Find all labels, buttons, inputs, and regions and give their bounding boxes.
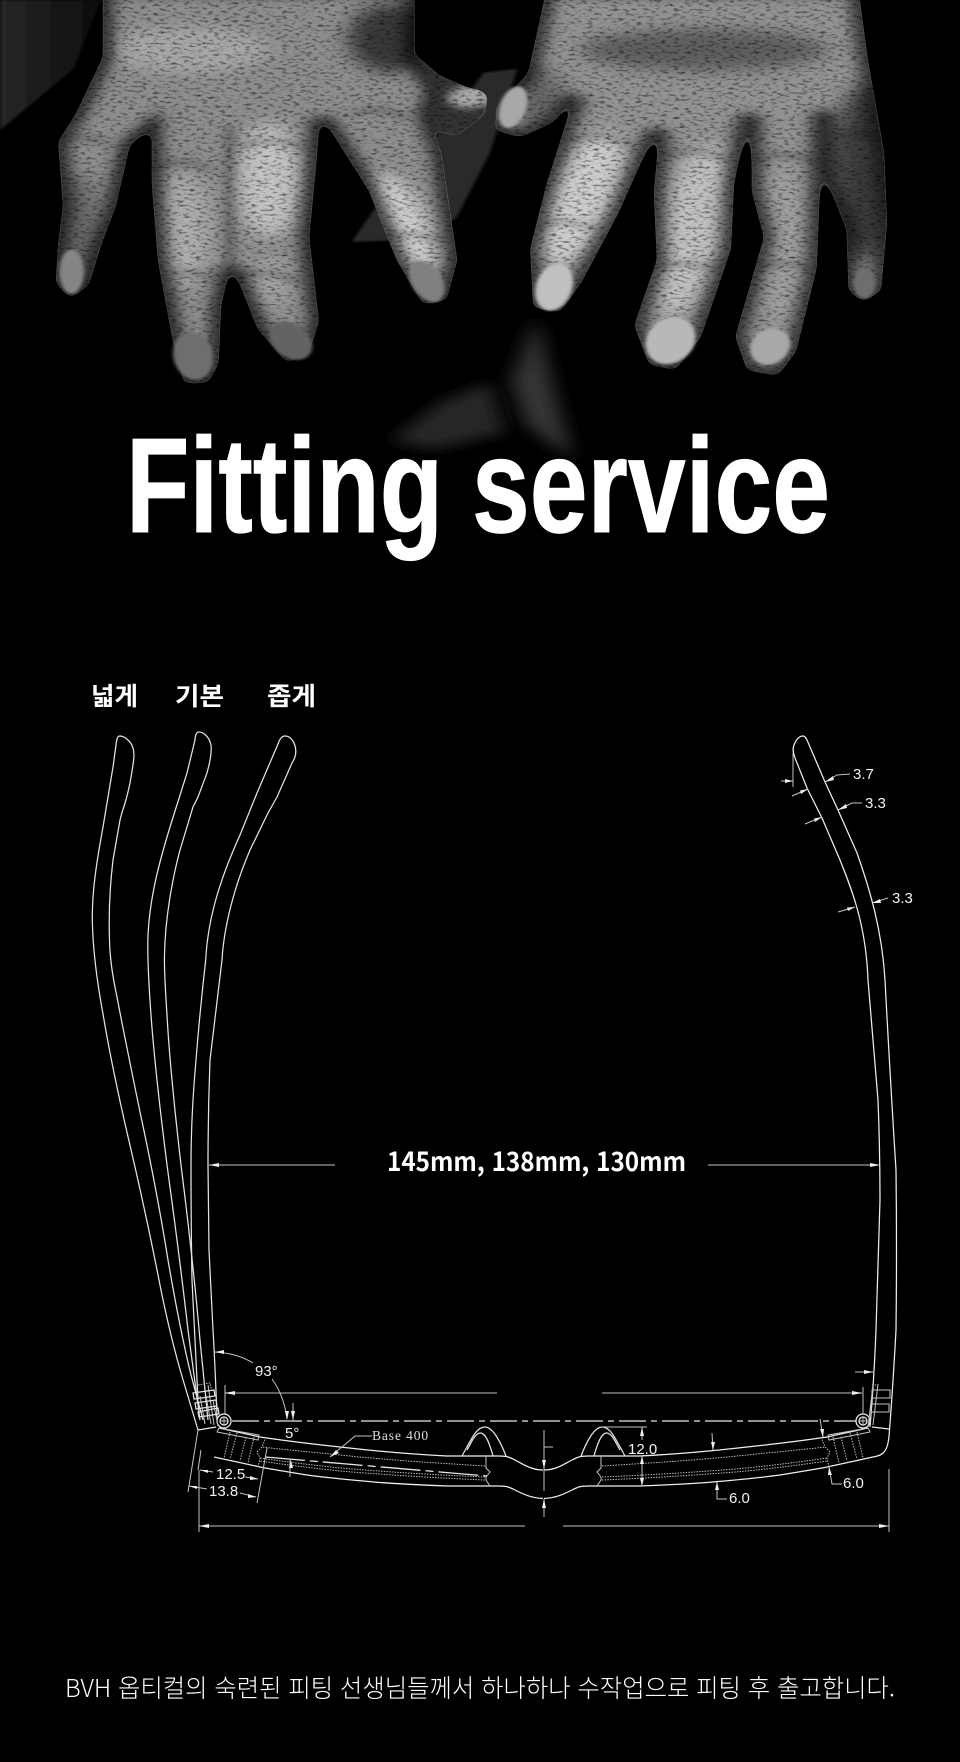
temple option labels: 기본 xyxy=(175,677,224,713)
photo: wrinkled hands xyxy=(0,0,891,459)
temple option labels xyxy=(91,677,316,713)
left temple: narrow xyxy=(191,736,296,1417)
caption: BVH 옵티컬의 숙련된 피팅 선생님들께서 하나하나 수작업으로 피팅 후 출고합니다. xyxy=(65,1669,895,1705)
left temple: standard xyxy=(148,732,211,1420)
right temple thickness dimensions: 3.3 xyxy=(865,795,886,812)
temple option labels: 좁게 xyxy=(267,677,316,713)
left hinge xyxy=(193,1383,219,1430)
right temple thickness dimensions: 3.3 xyxy=(892,890,913,907)
lug dimensions xyxy=(188,1430,267,1503)
right temple xyxy=(793,736,896,1457)
right hand xyxy=(493,0,891,377)
6.0 dimensions xyxy=(711,1419,864,1507)
thickness values: 3.7 xyxy=(853,766,874,783)
angle dimensions: 5° xyxy=(285,1425,299,1442)
base curve callout: Base 400 xyxy=(372,1428,429,1443)
left temple: wide xyxy=(92,736,203,1430)
6.0 dimensions: 6.0 xyxy=(729,1490,750,1507)
angle dimensions xyxy=(215,1350,299,1442)
12.0 lens height dimension xyxy=(600,1427,657,1486)
upper span dimension xyxy=(225,1370,873,1415)
left hand xyxy=(54,0,490,385)
lug dimensions: 12.5 xyxy=(216,1466,245,1483)
frame front: right half xyxy=(544,1414,873,1498)
temple option labels: 넓게 xyxy=(91,677,138,713)
width text: 145mm, 138mm, 130mm xyxy=(387,1142,686,1179)
overall width dimension xyxy=(199,1469,889,1532)
base curve callout xyxy=(265,1428,487,1477)
angle dimensions: 93° xyxy=(255,1363,278,1380)
right hinge xyxy=(868,1384,890,1429)
temple width dimension xyxy=(209,1142,880,1179)
knuckle creases xyxy=(542,133,882,270)
frame front: left half xyxy=(214,1414,543,1498)
right temple thickness dimensions xyxy=(781,753,913,912)
knuckle creases xyxy=(67,110,441,281)
lug dimensions: 13.8 xyxy=(209,1483,238,1500)
bridge dimension xyxy=(542,1430,553,1517)
6.0 dimensions: 6.0 xyxy=(843,1475,864,1492)
fingernails xyxy=(59,85,875,381)
centre line xyxy=(232,1420,856,1422)
12.0 lens height dimension: 12.0 xyxy=(628,1441,657,1458)
